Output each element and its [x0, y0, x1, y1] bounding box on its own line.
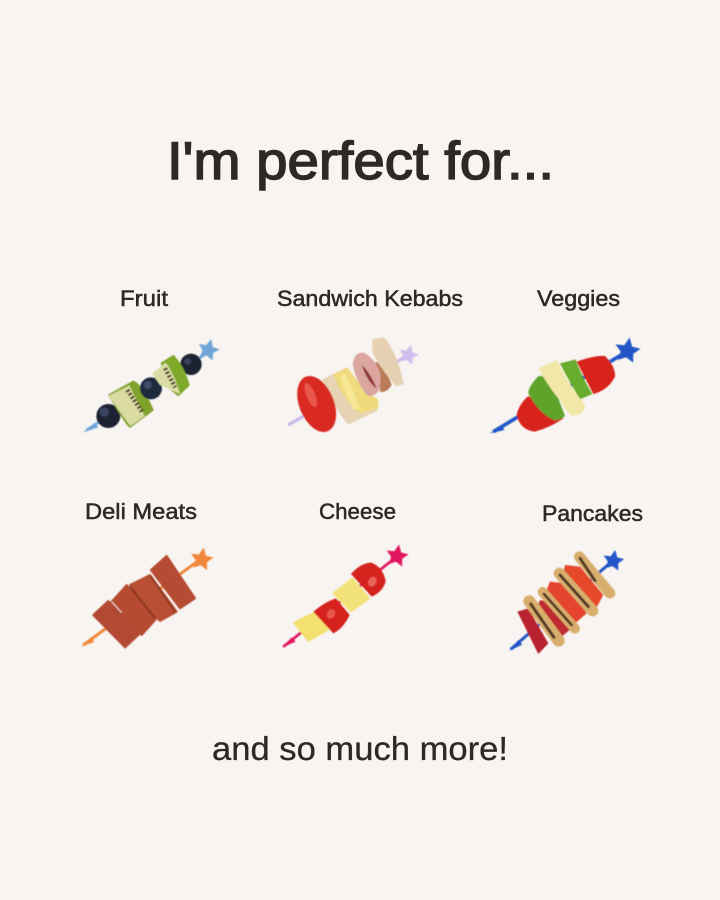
label: Fruit: Fruit — [120, 286, 168, 311]
skewer: deli meats — [81, 546, 215, 647]
label: Pancakes: Pancakes — [542, 501, 643, 526]
skewer: fruit — [83, 336, 222, 433]
skewer: sandwich kebab — [288, 338, 420, 438]
label: Cheese: Cheese — [319, 499, 396, 524]
skewer: veggies — [490, 335, 642, 433]
label: Sandwich Kebabs: Sandwich Kebabs — [277, 286, 463, 311]
label: Deli Meats: Deli Meats — [85, 499, 197, 524]
skewer: cheese — [282, 543, 410, 647]
skewer: pancakes — [509, 548, 626, 654]
label: Veggies: Veggies — [537, 286, 620, 311]
title: I'm perfect for... — [167, 132, 554, 191]
closing line: and so much more! — [212, 730, 508, 767]
